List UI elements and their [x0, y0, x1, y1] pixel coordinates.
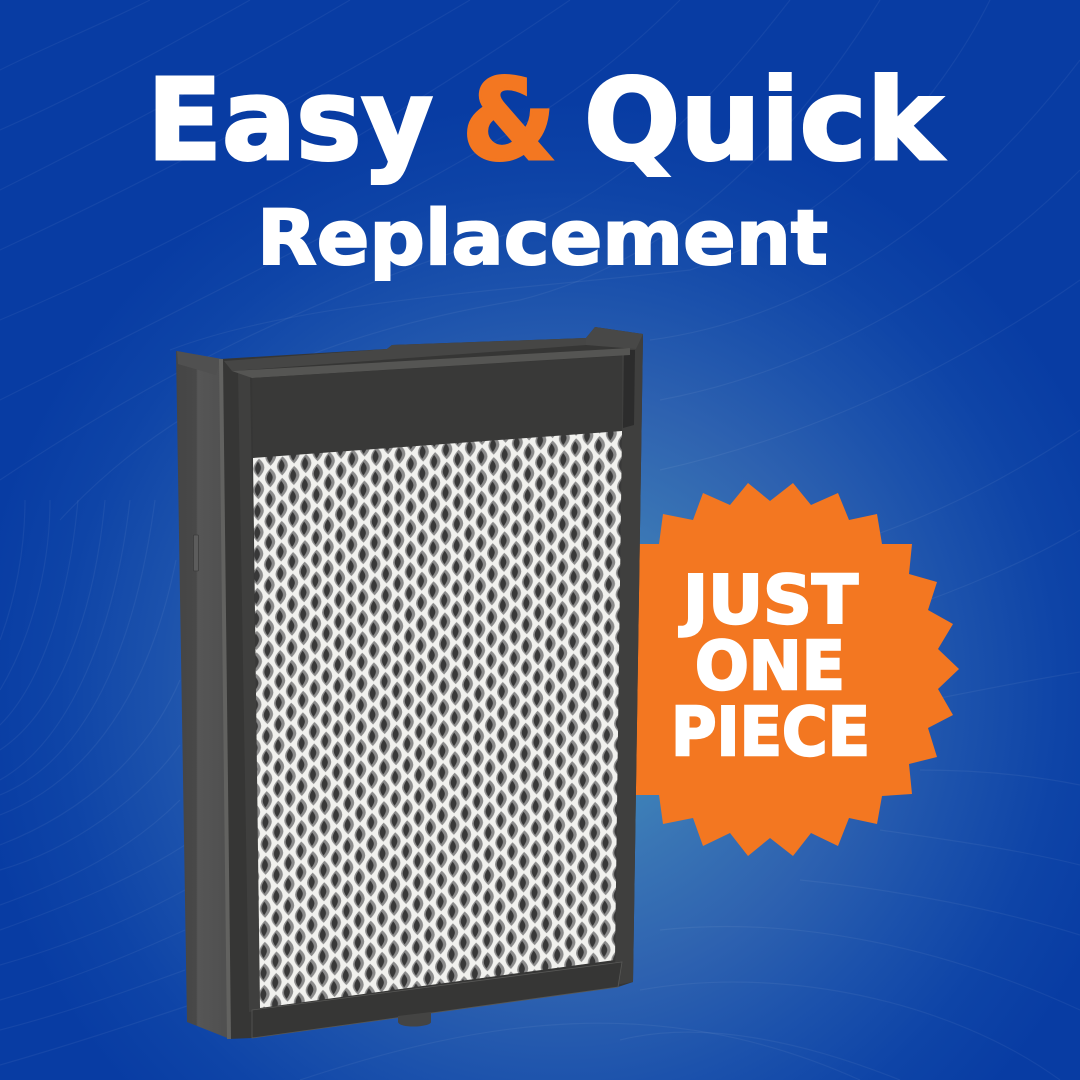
- frame left inner column: [238, 372, 262, 1012]
- title word: ampersand: &: [462, 56, 556, 186]
- badge: just one piece: [630, 483, 959, 856]
- front top rail: [232, 348, 630, 378]
- badge text: JUST: JUST: [679, 561, 858, 639]
- starburst: [630, 483, 959, 856]
- frame right column: [615, 334, 643, 985]
- side panel latch: [194, 535, 198, 571]
- frame left edge highlight: [219, 359, 231, 1039]
- filter mesh: [253, 431, 622, 1008]
- badge text: ONE: ONE: [695, 627, 845, 705]
- side panel: [176, 351, 230, 1039]
- frame right inner slot: [623, 350, 635, 428]
- bottom foot: [398, 1012, 431, 1027]
- bottom rail: [252, 962, 622, 1038]
- title word: Quick: Quick: [584, 56, 945, 186]
- top band: [252, 356, 622, 458]
- badge text: PIECE: PIECE: [671, 693, 870, 771]
- subtitle: Replacement: Replacement: [257, 193, 828, 282]
- title: [147, 56, 945, 282]
- top corner tower: [586, 327, 643, 349]
- front frame: [220, 327, 643, 1039]
- product: filter cartridge: [176, 327, 643, 1039]
- rear rail: [224, 338, 586, 371]
- side panel top lip: [177, 351, 220, 375]
- title word: Easy: Easy: [147, 56, 433, 186]
